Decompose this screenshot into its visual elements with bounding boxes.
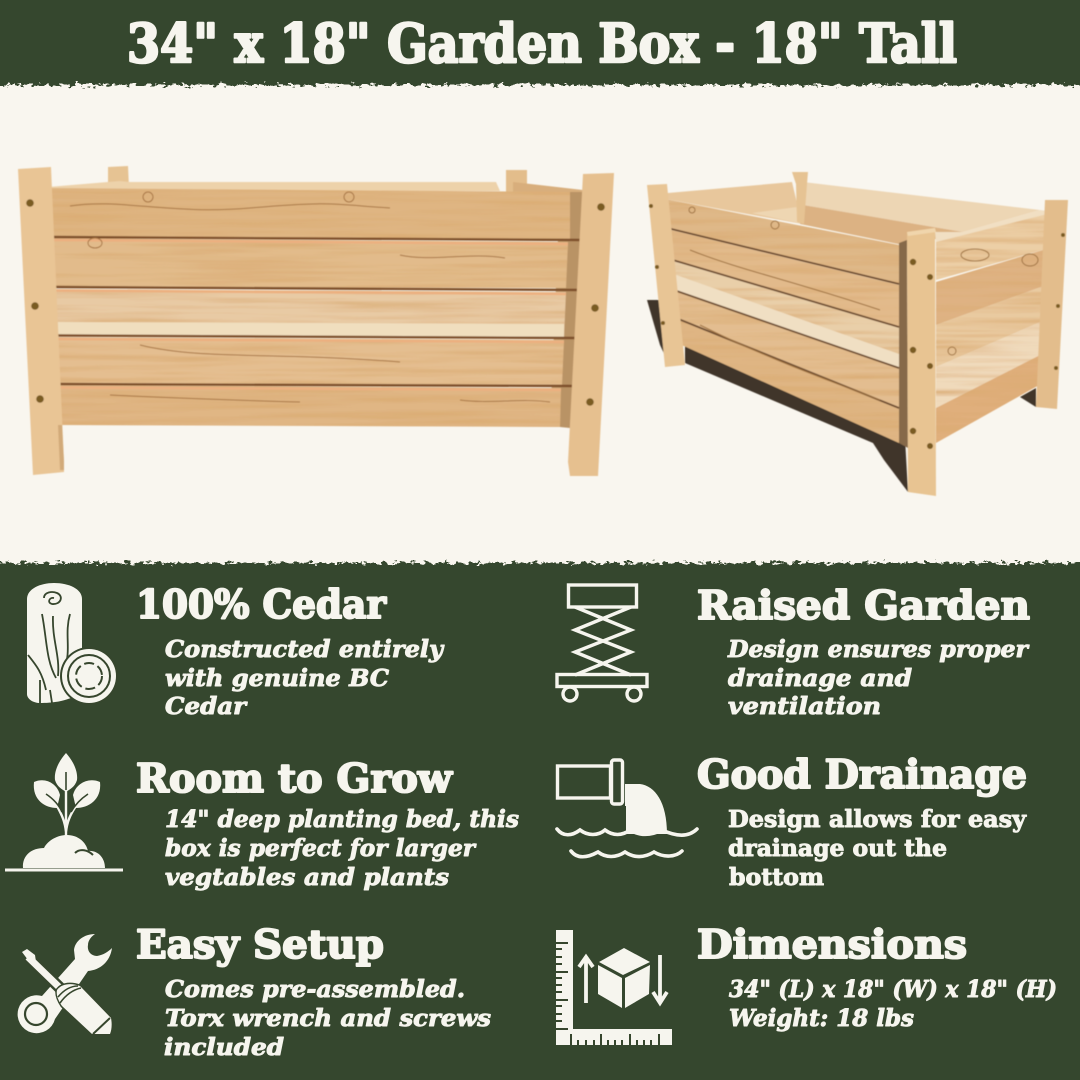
description: 14" deep planting bed, this [165,806,519,833]
title: 34" x 18" Garden Box - 18" Tall [127,13,957,75]
plank light stripe [54,322,564,337]
plank gaps [50,237,583,386]
description: ventilation [728,693,881,720]
planks [47,188,570,427]
shadow behind planks [550,192,586,428]
photo: front view of cedar garden box [18,166,614,476]
heading: Good Drainage [697,752,1027,798]
description [727,636,1030,720]
description [164,976,491,1061]
description: box is perfect for larger [165,835,477,862]
icon: scissor lift [557,585,647,701]
description [165,636,445,720]
plank gaps left face [663,227,899,408]
left post [18,167,64,475]
icon: drainage pipe [557,760,697,857]
corner shadow strip [899,240,908,448]
description: drainage out the [728,835,947,862]
heading: Easy Setup [136,922,384,968]
interior walls [660,182,1055,246]
description [165,806,519,891]
description: Comes pre-assembled. [165,976,465,1003]
right post [1036,200,1068,409]
heading: Raised Garden [697,583,1030,629]
description: Design ensures proper [727,636,1030,663]
description [728,806,1027,891]
heading: 100% Cedar [136,582,386,628]
light stripe on left face [668,272,899,368]
description [729,976,1057,1032]
icon: ruler and cube [556,930,672,1045]
heading: Dimensions [697,922,967,968]
right face planks [936,212,1055,443]
description: with genuine BC [165,665,390,692]
description: 34" (L) x 18" (W) x 18" (H) [729,976,1057,1003]
bolts [26,199,605,406]
ground shadow [647,300,1036,492]
feature: 100% Cedar [27,582,445,720]
back posts and inner rim [48,166,583,196]
left face planks [660,198,899,443]
photo: angled view of cedar garden box [647,172,1068,496]
heading: Room to Grow [136,756,453,802]
icon: sprout [5,753,123,872]
description: Weight: 18 lbs [729,1005,914,1032]
description: Design allows for easy [728,806,1027,833]
lower green panel with torn edge [0,563,1080,1080]
back post [792,172,808,224]
description: Cedar [165,693,248,720]
description: bottom [729,864,824,891]
description: drainage and [728,665,912,692]
bolts [649,204,1065,449]
right post [568,173,614,476]
header band with torn edge [0,0,1080,85]
icon: cedar logs [27,583,118,705]
left post [647,184,685,367]
plank top highlights [50,240,568,390]
feature: Room to Grow [5,753,519,891]
description: Constructed entirely [165,636,445,663]
feature: Raised Garden [557,583,1030,720]
icon: wrench and screwdriver [18,934,112,1034]
description: Torx wrench and screws [165,1005,491,1032]
description: included [164,1034,284,1061]
left post inner shadow [58,425,64,470]
feature: Good Drainage [557,752,1027,891]
wood knots and grain [70,192,550,402]
feature: Dimensions [556,922,1057,1045]
knots on right and left faces [689,207,1038,400]
feature: Easy Setup [18,922,491,1061]
front corner post [907,228,936,496]
description: vegtables and plants [165,864,449,891]
